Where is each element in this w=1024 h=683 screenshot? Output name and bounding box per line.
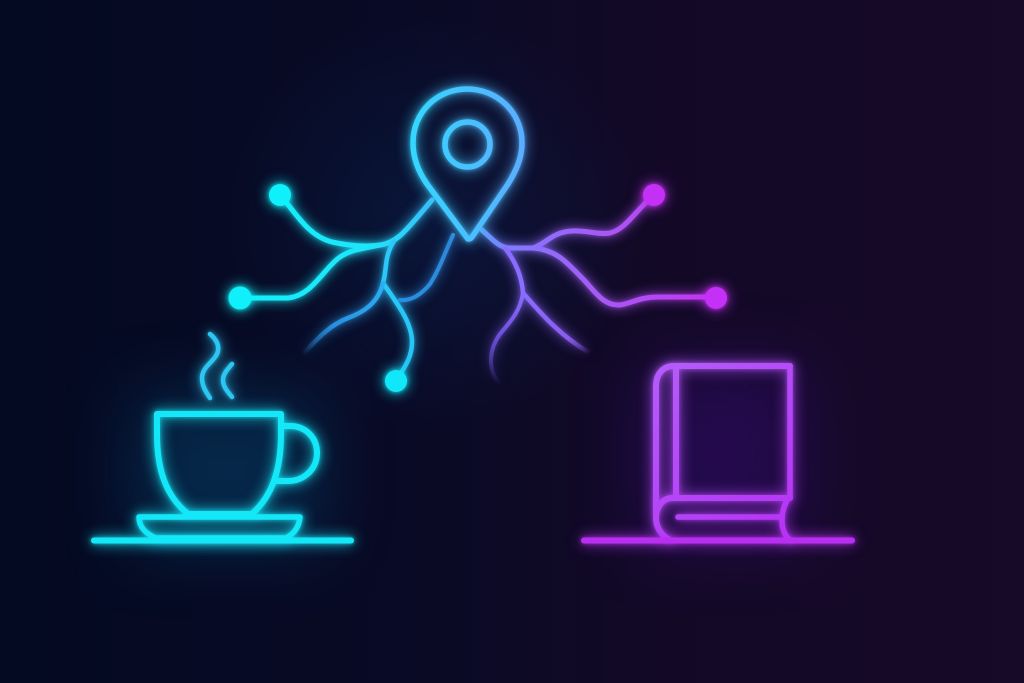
branch: trunk and lower node	[383, 241, 412, 381]
node: middle left	[228, 286, 252, 310]
node: top left	[269, 184, 291, 206]
cover bottom and page block	[656, 498, 790, 540]
steam: long wisp	[202, 334, 218, 398]
icon: coffee cup	[139, 334, 317, 538]
right network branches	[482, 195, 716, 385]
cup body	[157, 414, 281, 514]
left network branches	[240, 195, 453, 381]
node: middle right	[705, 287, 727, 309]
branch: fading lower-left	[304, 283, 383, 353]
cup handle	[276, 426, 317, 481]
page line	[678, 514, 782, 520]
pin inner ring	[445, 122, 490, 167]
cover right edge	[787, 366, 793, 498]
branch: middle-right node	[533, 248, 716, 305]
saucer	[139, 517, 300, 538]
branch: top-left node to pin	[280, 195, 432, 246]
branch: bridge from pin tip	[400, 235, 453, 300]
branch: upper-right node	[482, 195, 654, 248]
icon: book	[656, 366, 790, 540]
pin outline	[413, 89, 522, 239]
page edge	[782, 498, 790, 540]
ground line: right	[584, 538, 852, 544]
branch: fading lower-right	[505, 248, 588, 352]
branch: middle-left node	[240, 245, 380, 298]
icon: location pin	[413, 89, 522, 239]
node: bottom	[385, 370, 407, 392]
book cover and spine	[656, 366, 790, 518]
network end nodes	[228, 184, 727, 392]
ground line: left	[94, 538, 351, 544]
steam: short wisp	[223, 364, 232, 397]
node: top right	[643, 184, 665, 206]
inner spine line	[673, 368, 679, 497]
branch: fading down	[491, 293, 523, 385]
